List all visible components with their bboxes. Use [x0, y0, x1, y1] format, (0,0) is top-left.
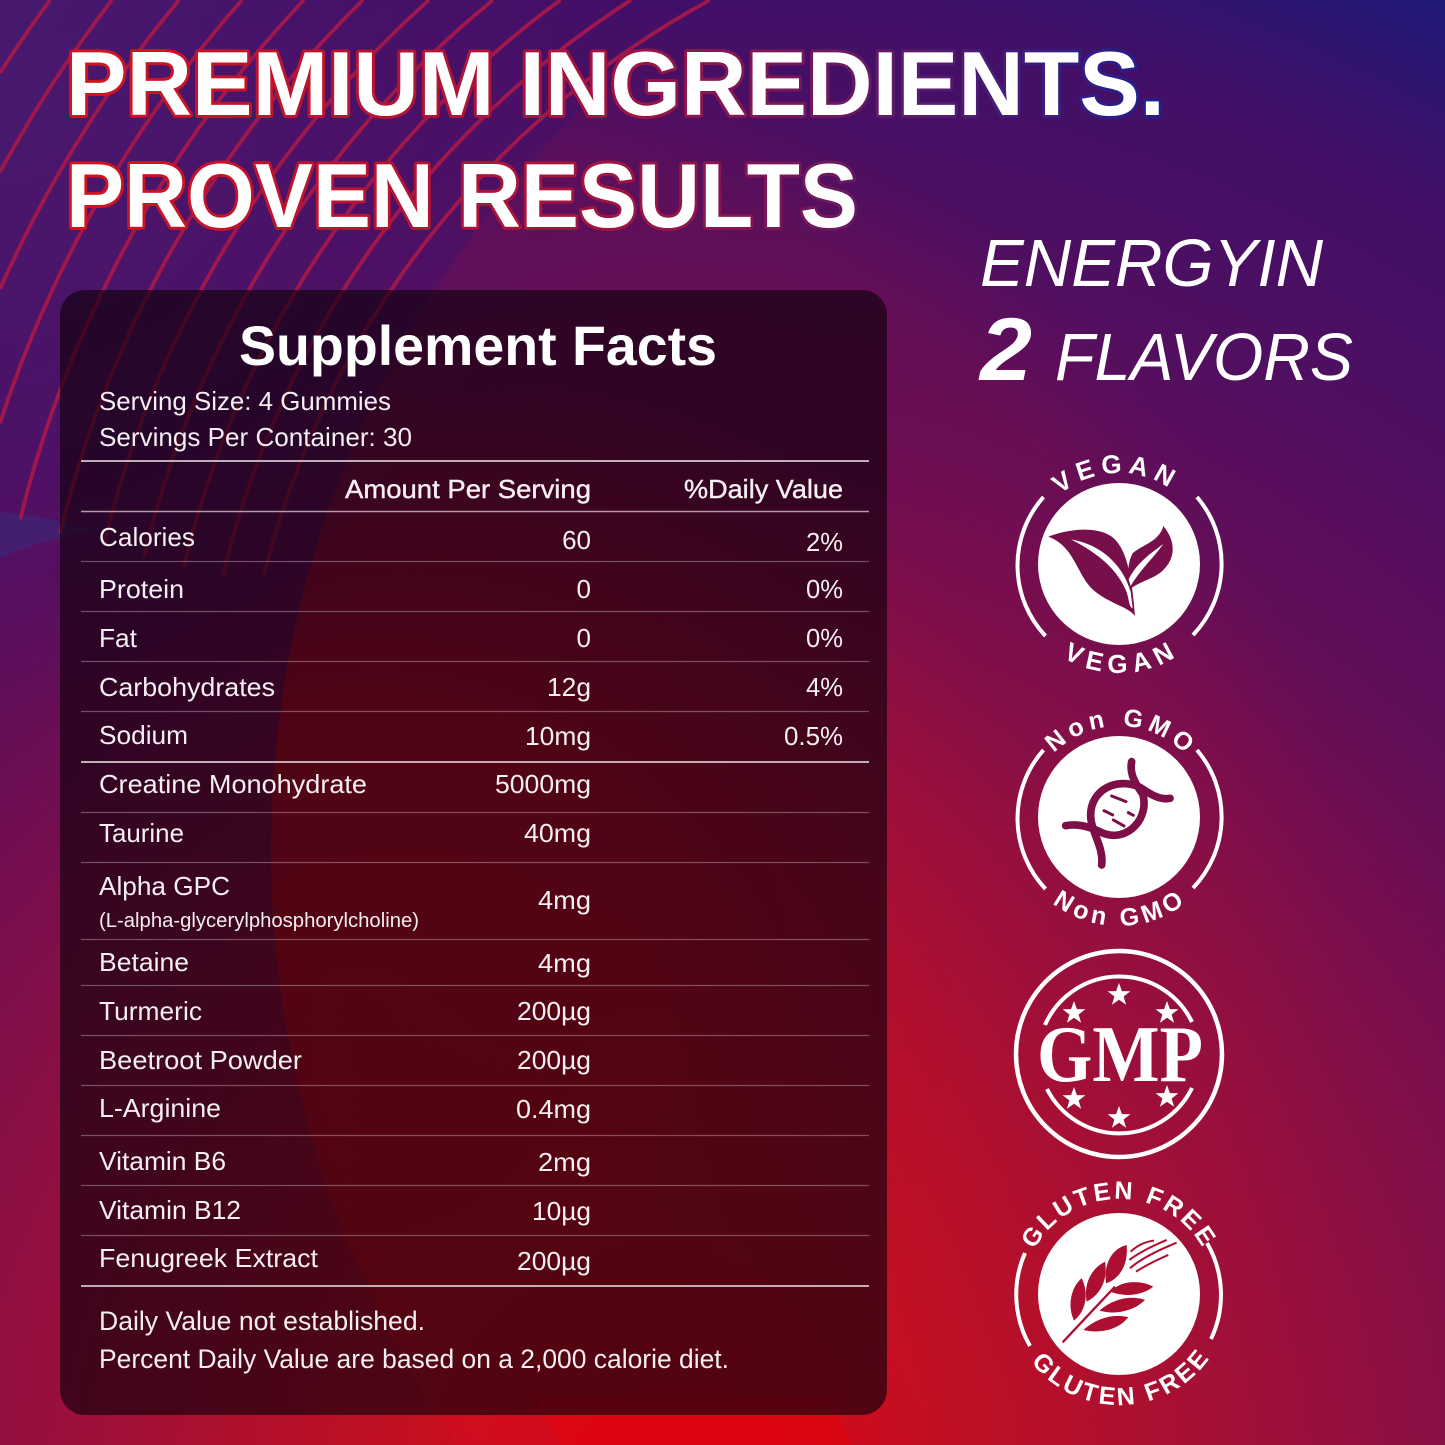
title: [66, 34, 1165, 247]
nutrient names: Sodium: [99, 720, 188, 750]
nutrient names: Fat: [99, 623, 138, 653]
footnote: [99, 1306, 729, 1374]
flavors heading: [978, 226, 1353, 399]
badge: gmp: [1016, 951, 1222, 1157]
nutrient names: L-Arginine: [99, 1093, 221, 1123]
table rules: [81, 461, 869, 1286]
nutrient names: Creatine Monohydrate: [99, 769, 367, 799]
amounts: 40mg: [524, 818, 591, 848]
flavors heading: ENERGYIN: [980, 226, 1324, 301]
badge: gluten free: GLUTEN FREE: [1034, 1349, 1209, 1406]
icon: wheat: [1063, 1240, 1177, 1342]
amounts: 200µg: [517, 996, 591, 1026]
amounts: 10µg: [532, 1196, 591, 1226]
nutrient names: Fenugreek Extract: [99, 1243, 319, 1273]
table header: [345, 474, 843, 504]
badge: vegan: [1016, 455, 1224, 674]
daily values: 2%: [806, 527, 843, 557]
title: PREMIUM INGREDIENTS.: [66, 34, 1165, 135]
amounts: 200µg: [517, 1246, 591, 1276]
badge: vegan: VEGAN: [1068, 642, 1174, 674]
badge: vegan: VEGAN: [1050, 455, 1176, 490]
amounts: 10mg: [525, 721, 591, 751]
amounts: 5000mg: [495, 769, 591, 799]
serving info: Serving Size: 4 Gummies: [99, 386, 391, 416]
badge: gluten free: GLUTEN FREE: [1023, 1181, 1216, 1246]
serving info: Servings Per Container: 30: [99, 422, 412, 452]
nutrient names: [99, 522, 419, 1273]
nutrient names: (L-alpha-glycerylphosphorylcholine): [99, 910, 419, 932]
amounts: 2mg: [538, 1147, 591, 1177]
nutrient names: Vitamin B12: [99, 1195, 241, 1225]
flavors heading: 2: [978, 299, 1032, 399]
nutrient names: Alpha GPC: [99, 871, 230, 901]
icon: leaves: [1048, 526, 1173, 616]
serving info: [99, 386, 412, 452]
daily values: 0%: [806, 623, 843, 653]
footnote: Percent Daily Value are based on a 2,000 calorie diet.: [99, 1344, 729, 1374]
panel heading: Supplement Facts: [239, 314, 717, 377]
table header: %Daily Value: [684, 474, 843, 504]
amounts: 4mg: [538, 948, 591, 978]
nutrient names: Taurine: [99, 818, 184, 848]
footnote: Daily Value not established.: [99, 1306, 425, 1336]
amounts: 4mg: [538, 885, 591, 915]
amounts: [495, 525, 591, 1276]
nutrient names: Vitamin B6: [99, 1146, 226, 1176]
daily values: [784, 527, 843, 751]
badge: gmp: GMP: [1037, 1011, 1203, 1099]
amounts: 12g: [547, 672, 591, 702]
nutrient names: Calories: [99, 522, 195, 552]
amounts: 0: [577, 574, 591, 604]
title: PROVEN RESULTS: [66, 146, 858, 247]
amounts: 200µg: [517, 1045, 591, 1075]
amounts: 60: [562, 525, 591, 555]
amounts: 0: [577, 623, 591, 653]
table header: Amount Per Serving: [345, 474, 591, 504]
badge: non gmo: Non GMO: [1054, 890, 1181, 926]
daily values: 4%: [806, 672, 843, 702]
daily values: 0%: [806, 574, 843, 604]
icon: dna: [1066, 762, 1170, 865]
amounts: 0.4mg: [516, 1094, 591, 1124]
panel: supplement facts: [60, 290, 887, 1415]
daily values: 0.5%: [784, 721, 843, 751]
nutrient names: Carbohydrates: [99, 672, 275, 702]
badge: gluten free: [1014, 1181, 1223, 1406]
nutrient names: Protein: [99, 574, 184, 604]
nutrient names: Turmeric: [99, 996, 202, 1026]
badge: non gmo: Non GMO: [1044, 710, 1192, 752]
badge: non gmo: [1016, 710, 1224, 926]
icon: stars: [1063, 983, 1178, 1128]
nutrient names: Beetroot Powder: [99, 1045, 302, 1075]
nutrient names: Betaine: [99, 947, 189, 977]
flavors heading: FLAVORS: [1055, 320, 1353, 395]
